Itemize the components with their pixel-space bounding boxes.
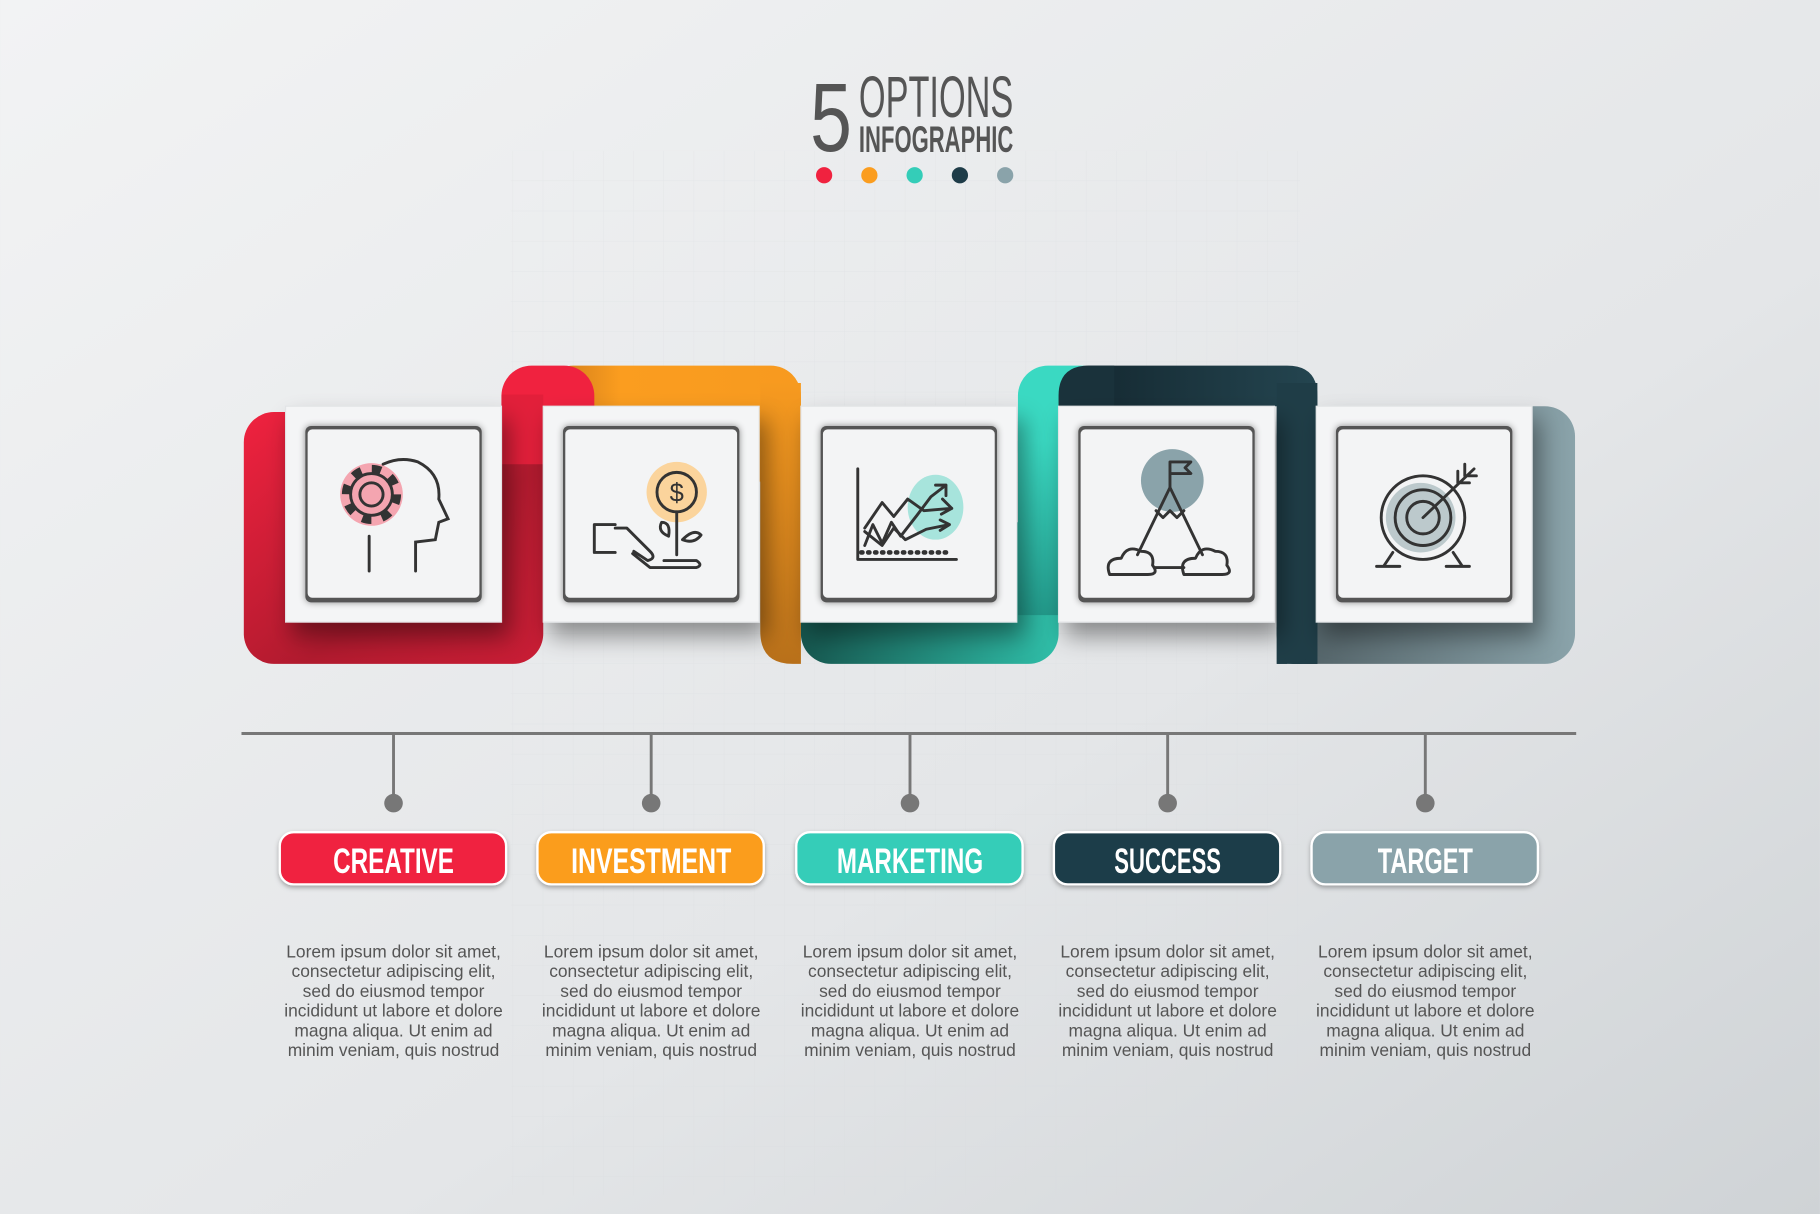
text: marketing: magna aliqua. Ut enim ad <box>811 1020 1009 1040</box>
icon: target <box>1377 464 1476 566</box>
card 4: success <box>1059 406 1274 622</box>
text: marketing: minim veniam, quis nostrud <box>804 1040 1016 1060</box>
text: success: magna aliqua. Ut enim ad <box>1069 1020 1267 1040</box>
color dots <box>816 167 1013 183</box>
text: success: consectetur adipiscing elit, <box>1066 961 1270 981</box>
text: creative: magna aliqua. Ut enim ad <box>294 1020 493 1040</box>
text: creative: sed do eiusmod tempor <box>303 981 485 1001</box>
label: target: TARGET <box>1378 842 1473 881</box>
text: target: Lorem ipsum dolor sit amet, <box>1318 942 1533 962</box>
text: marketing: incididunt ut labore et dolore <box>801 1001 1019 1021</box>
card 3: marketing <box>801 406 1017 622</box>
label: creative <box>280 832 506 884</box>
label: success: SUCCESS <box>1114 842 1221 881</box>
title <box>810 63 1013 172</box>
label: success <box>1054 832 1280 884</box>
text: success: incididunt ut labore et dolore <box>1058 1001 1277 1021</box>
text: investment: magna aliqua. Ut enim ad <box>552 1020 750 1040</box>
text: target: sed do eiusmod tempor <box>1334 981 1516 1001</box>
text: target: incididunt ut labore et dolore <box>1316 1001 1535 1021</box>
text: target: magna aliqua. Ut enim ad <box>1326 1020 1524 1040</box>
text: investment: incididunt ut labore et dolore <box>542 1001 760 1021</box>
label: investment <box>537 832 764 884</box>
text: investment: consectetur adipiscing elit, <box>549 961 753 981</box>
text: creative: Lorem ipsum dolor sit amet, <box>286 942 501 962</box>
text: marketing: sed do eiusmod tempor <box>819 981 1001 1001</box>
text: marketing: consectetur adipiscing elit, <box>808 961 1012 981</box>
text: success: sed do eiusmod tempor <box>1077 981 1259 1001</box>
text: creative: incididunt ut labore et dolore <box>284 1001 503 1021</box>
icon: chart <box>858 469 963 559</box>
text: investment: minim veniam, quis nostrud <box>545 1040 757 1060</box>
ribbon <box>244 366 1575 664</box>
text: creative <box>284 942 503 1060</box>
text: success: Lorem ipsum dolor sit amet, <box>1060 942 1275 962</box>
label: investment: INVESTMENT <box>571 842 731 881</box>
text: target: minim veniam, quis nostrud <box>1319 1040 1531 1060</box>
title: 5 <box>810 63 852 172</box>
card 2: investment <box>543 406 759 622</box>
text: target: consectetur adipiscing elit, <box>1323 961 1527 981</box>
card 5: target <box>1316 406 1532 622</box>
title: INFOGRAPHIC <box>859 118 1013 160</box>
text: investment: Lorem ipsum dolor sit amet, <box>544 942 758 962</box>
card 1: creative <box>286 406 501 622</box>
timeline <box>241 734 1576 812</box>
text: target <box>1316 942 1535 1060</box>
label: target <box>1312 832 1538 884</box>
text: marketing: Lorem ipsum dolor sit amet, <box>803 942 1017 962</box>
text: creative: consectetur adipiscing elit, <box>292 961 496 981</box>
label: marketing: MARKETING <box>837 842 983 881</box>
text: investment <box>542 942 760 1060</box>
icon: hand with dollar plant: $ <box>670 479 684 507</box>
icon: hand with dollar plant <box>594 462 707 568</box>
text: investment: sed do eiusmod tempor <box>560 981 742 1001</box>
text: success <box>1058 942 1277 1060</box>
text: success: minim veniam, quis nostrud <box>1062 1040 1273 1060</box>
text: marketing <box>801 942 1019 1060</box>
text: creative: minim veniam, quis nostrud <box>288 1040 499 1060</box>
label: marketing <box>796 832 1023 884</box>
label: creative: CREATIVE <box>333 842 454 881</box>
title: OPTIONS <box>859 65 1013 130</box>
icon: head with gear <box>340 460 448 571</box>
icon: mountain flag <box>1108 449 1229 575</box>
